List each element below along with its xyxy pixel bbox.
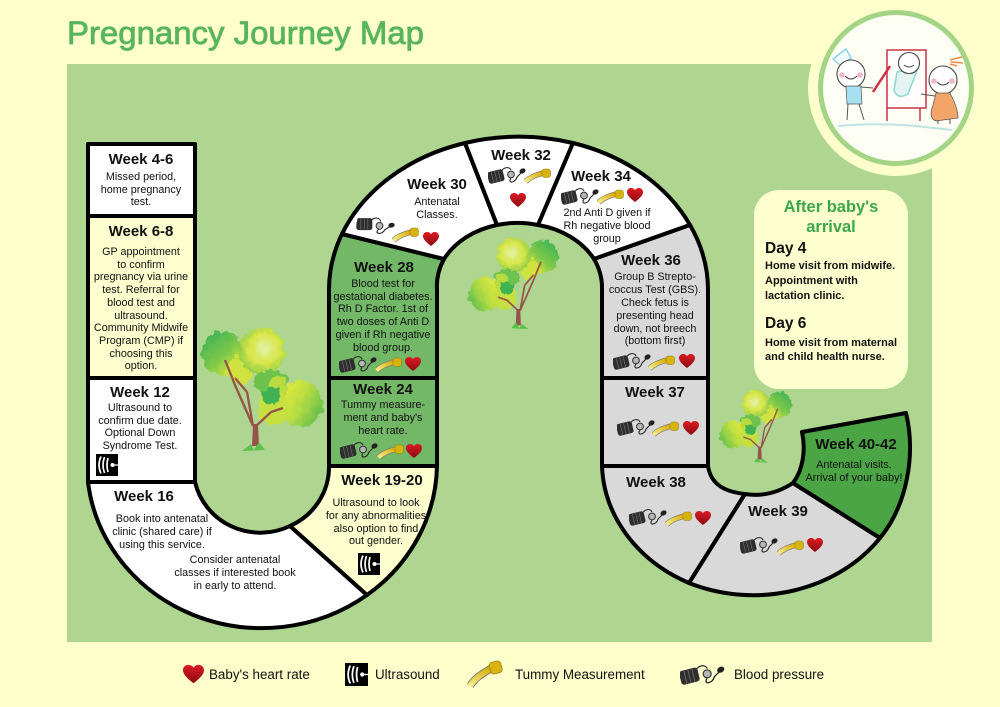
illustration: midwife, baby chart and mother in circle [808,0,984,176]
segment: week 36: Check fetus is [621,297,690,309]
segment: week 6-8: GP appointment [102,246,180,258]
segment: week 16: clinic (shared care) if [112,526,213,538]
segment: week 28: blood group. [353,342,413,354]
text: day 4: Day 4 [765,240,807,257]
title: Pregnancy Journey Map [67,15,424,51]
text: day 4: Appointment with [765,275,858,287]
segment: week 34: Rh negative blood [563,220,651,232]
segment: week 39 [689,483,880,595]
legend item: blood pressure: Blood pressure [734,667,824,682]
segment: week 6-8: Program (CMP) if [99,335,184,347]
segment: week 16: Week 16 [114,488,174,505]
segment: week 24: Week 24 [353,381,414,398]
segment: week 6-8: option. [125,360,157,372]
segment: week 28: Week 28 [354,259,414,276]
text: day 6: Home visit from maternal [765,337,897,349]
legend item: ultrasound [345,663,440,686]
legend item: ultrasound: Ultrasound [375,667,440,682]
segment: week 38: Week 38 [626,474,686,491]
segment: week 19-20: Week 19-20 [341,472,423,489]
segment: week 28: given if Rh negative [336,329,430,341]
text: day 4: Home visit from midwife. [765,260,895,272]
segment: week 19-20 [290,466,437,595]
segment: week 24: heart rate. [358,425,408,437]
segment: week 16: Consider antenatal [190,554,280,566]
segment: week 40-42: Arrival of your baby! [806,472,902,484]
segment: week 4-6: test. [131,196,151,208]
segment: week 36: coccus Test (GBS). [609,284,701,296]
legend item: tummy measurement: Tummy Measurement [515,667,645,682]
legend item: tummy measurement [466,660,645,686]
text: day 4: lactation clinic. [765,290,844,302]
segment: week 28 [329,234,444,378]
segment: week 6-8: Community Midwife [94,322,188,334]
segment: week 39: Week 39 [748,503,808,520]
segment: week 6-8: test. Referral for [102,284,180,296]
segment: week 28: gestational diabetes. [333,291,433,303]
segment: week 24: ment and baby's [344,412,423,424]
segment: week 19-20: also option to find [334,523,418,535]
segment: week 30: Antenatal [414,196,460,208]
segment: week 40-42: Antenatal visits. [816,459,892,471]
segment: week 36 [594,225,708,378]
segment: week 19-20: Ultrasound to look [332,497,420,509]
segment: week 6-8: ultrasound. [114,310,168,322]
segment: week 12: Syndrome Test. [103,440,177,452]
segment: week 36: (bottom first) [625,335,685,347]
segment: week 24 [329,378,437,466]
text: day 6: Day 6 [765,315,807,332]
heading: after baby's arrival: arrival [806,218,856,236]
legend item: blood pressure [679,665,824,685]
segment: week 4-6 [88,144,195,216]
segment: week 6-8: to confirm [117,259,165,271]
text: day 4 [765,240,895,302]
segment: week 16: in early to attend. [194,580,276,592]
legend item: baby's heart rate [183,665,310,683]
segment: week 37 [602,378,708,466]
segment: week 40-42 [793,413,910,538]
text: day 6: and child health nurse. [765,351,885,363]
segment: week 28: Blood test for [351,278,415,290]
segment: week 16: Book into antenatal [116,513,208,525]
segment: week 6-8: pregnancy via urine [94,271,188,283]
segment: week 34: 2nd Anti D given if [563,207,652,219]
segment: week 16: using this service. [119,539,205,551]
segment: week 28: two doses of Anti D [337,316,429,328]
segment: week 16: classes if interested book [174,567,296,579]
segment: week 36: down, not breech [614,323,696,335]
heading: after baby's arrival: After baby's [784,198,878,216]
legend item: baby's heart rate: Baby's heart rate [209,667,310,682]
segment: week 4-6: home pregnancy [101,184,182,196]
segment: week 32: Week 32 [491,147,551,164]
segment: week 37: Week 37 [625,384,685,401]
segment: week 36: Group B Strepto- [614,271,696,283]
panel: green map background [67,64,932,642]
segment: week 4-6: Missed period, [106,171,176,183]
segment: week 38 [602,466,745,583]
segment: week 34: Week 34 [571,168,632,185]
segment: week 6-8: choosing this [109,348,173,360]
icon: tree right [720,390,792,463]
icon: tree centre [469,238,559,329]
segment: week 12: Ultrasound to [108,402,172,414]
segment: week 12: confirm due date. [98,415,182,427]
segment: week 32 [465,137,573,225]
segment: week 12: Optional Down [105,427,175,439]
segment: week 34 [538,143,690,259]
segment: week 24: Tummy measure- [341,399,425,411]
panel: after baby's arrival [754,190,908,389]
segment: week 30: Classes. [416,209,458,221]
segment: week 28: Rh D Factor. 1st of [338,303,429,315]
segment: week 40-42: Week 40-42 [815,436,897,453]
segment: week 36: presenting head [616,310,694,322]
segment: week 30: Week 30 [407,176,467,193]
segment: week 34: group [593,233,621,245]
segment: week 30 [342,143,497,259]
segment: week 16 [88,482,367,628]
segment: week 19-20: out gender. [349,535,403,547]
segment: week 6-8 [88,216,195,378]
segment: week 4-6: Week 4-6 [109,151,173,168]
segment: week 6-8: blood test and [107,297,175,309]
text: day 6 [765,315,897,363]
segment: week 19-20: for any abnormalities [326,510,427,522]
segment: week 6-8: Week 6-8 [109,223,173,240]
segment: week 36: Week 36 [621,252,681,269]
segment: week 12: Week 12 [110,384,170,401]
icon: tree left [201,328,322,451]
legend [183,660,824,686]
segment: week 12 [88,378,195,482]
